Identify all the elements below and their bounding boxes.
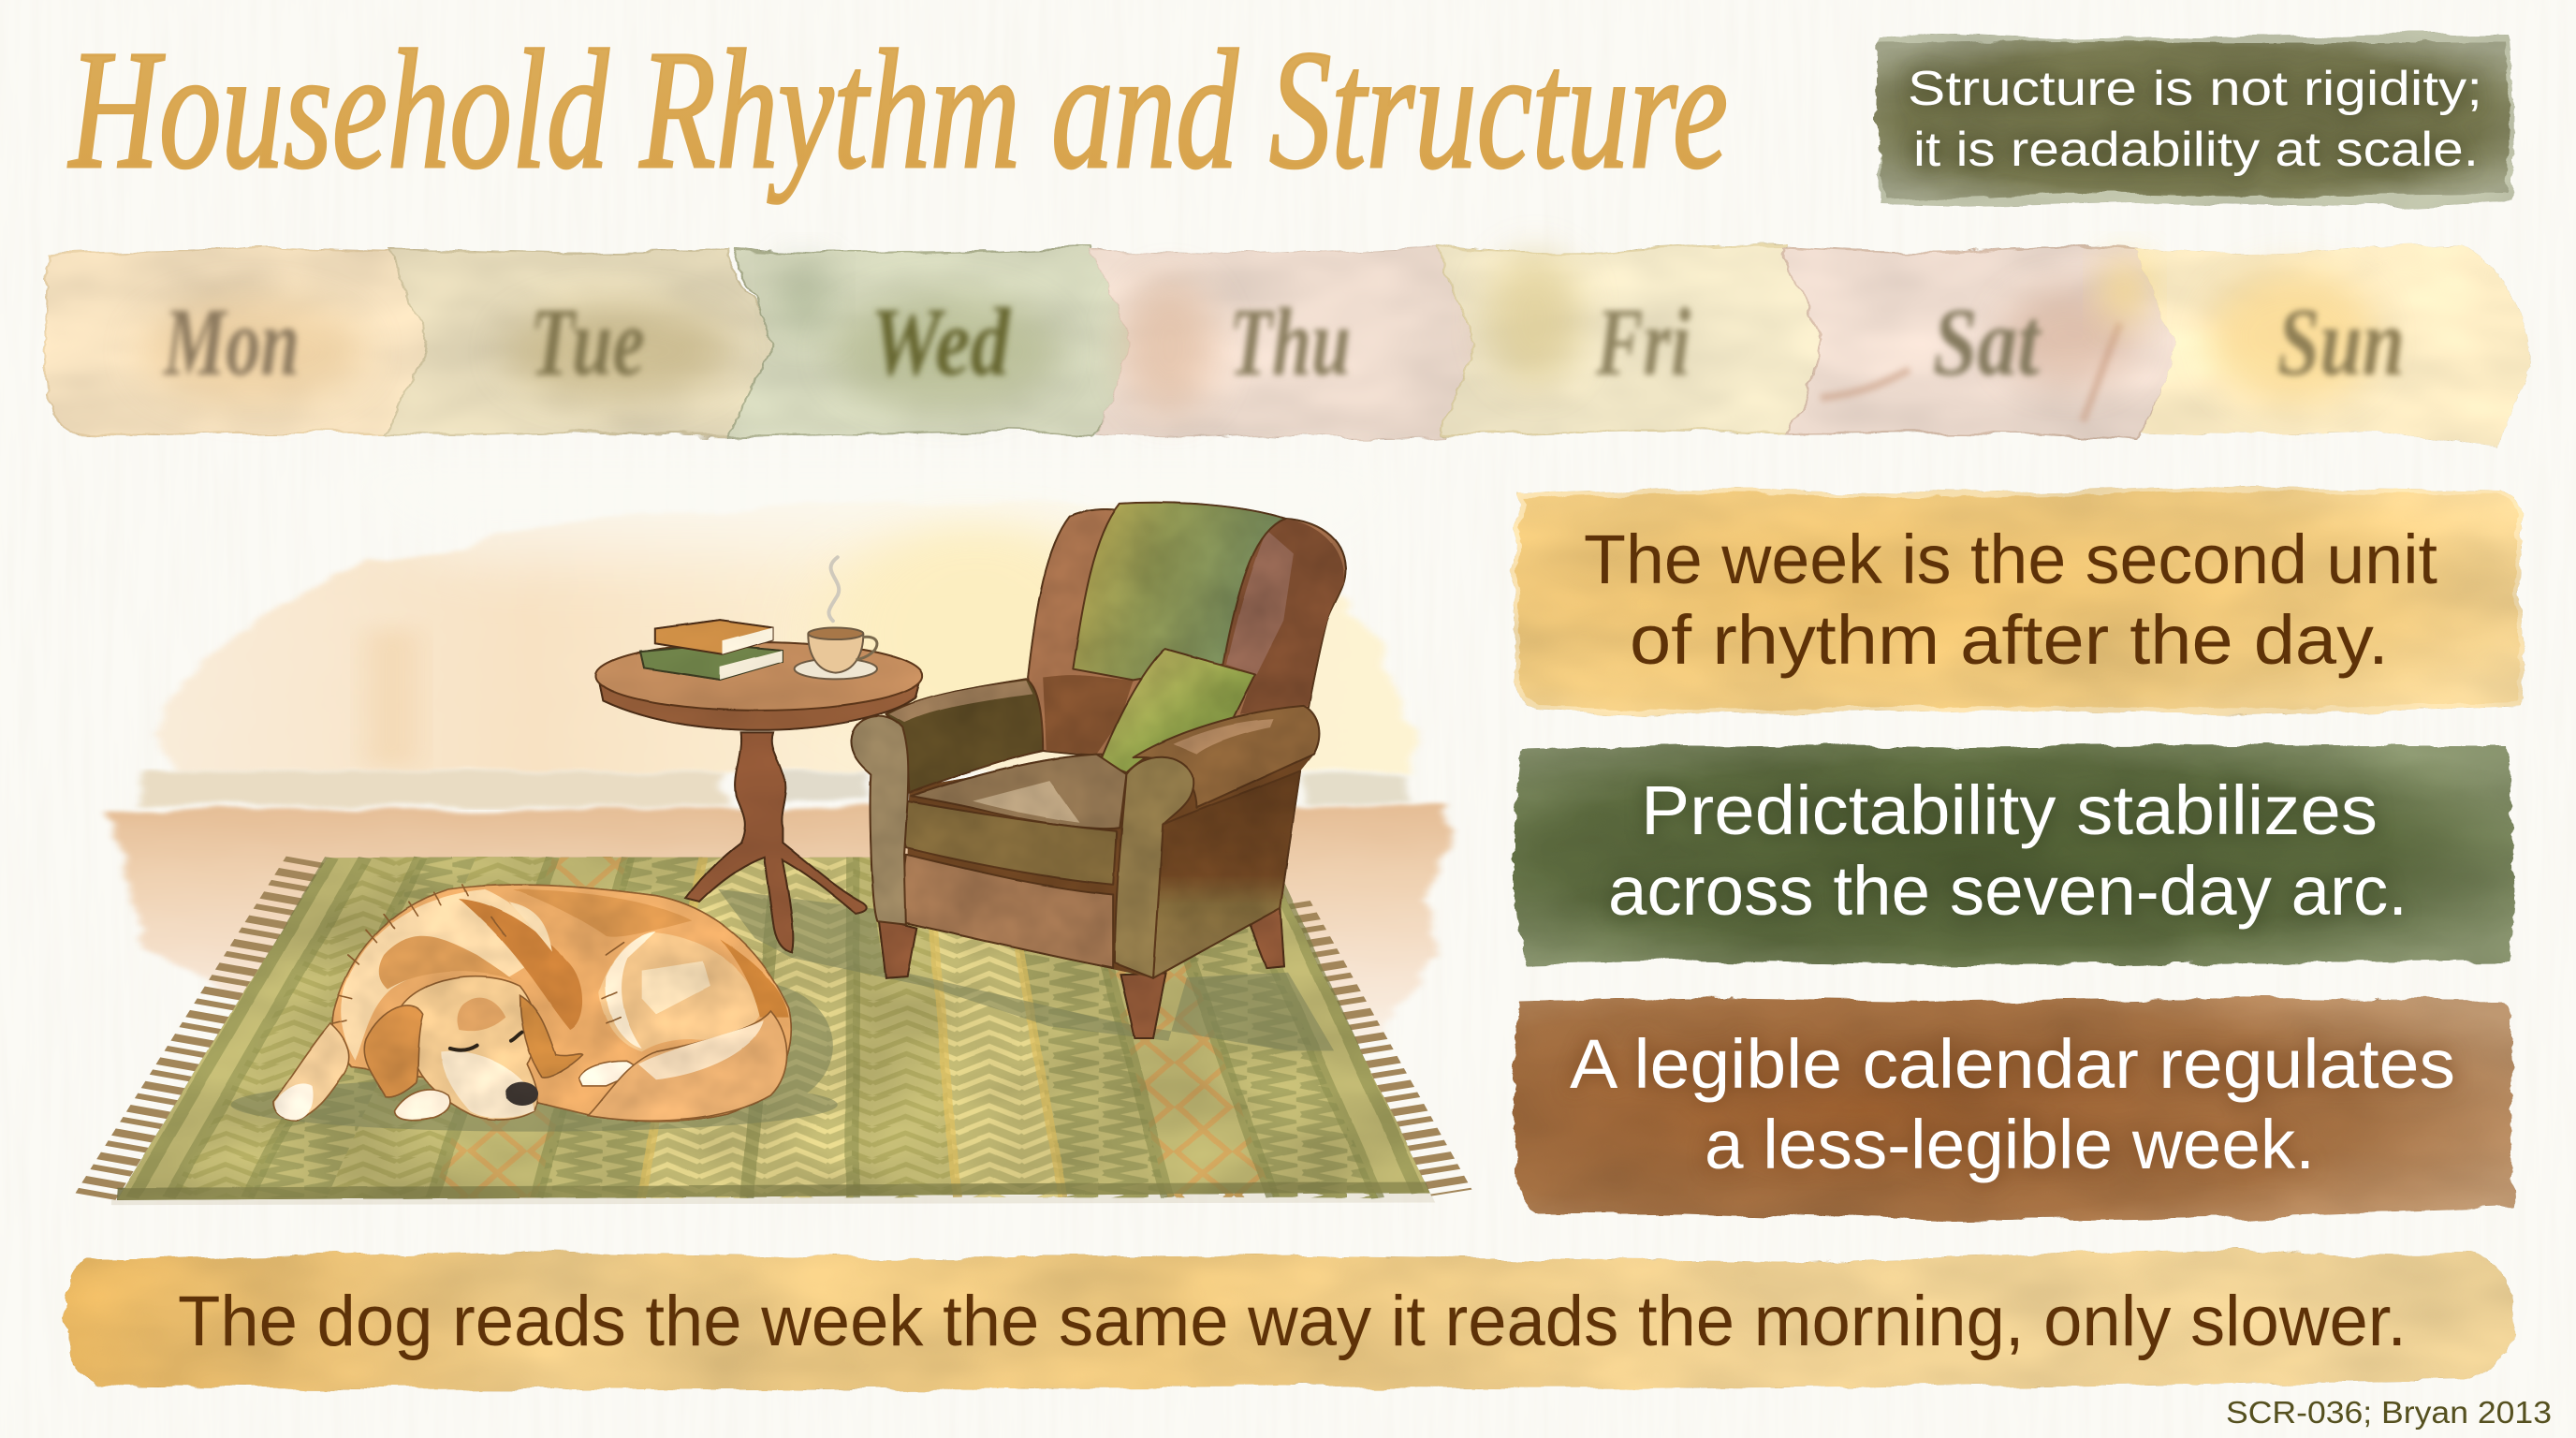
panel text	[1608, 771, 2408, 930]
hip highlight	[642, 961, 710, 1014]
panel wash	[1513, 998, 2514, 1221]
mane fur tufts	[334, 885, 624, 1023]
banner wash	[65, 1249, 2515, 1389]
steam	[828, 557, 839, 621]
shadows on rug	[231, 889, 1334, 1132]
panel text: across the seven-day arc.	[1608, 852, 2408, 930]
chair silhouette	[906, 721, 1313, 978]
panel text	[1584, 521, 2437, 679]
text panel: legible calendar	[1513, 998, 2514, 1221]
orange book	[655, 620, 773, 654]
panel text	[1570, 1025, 2455, 1183]
armchair	[851, 503, 1345, 1038]
throw blanket	[1073, 503, 1285, 680]
source note: SCR-036; Bryan 2013	[2226, 1395, 2552, 1430]
table base	[686, 732, 867, 953]
front leg and paw	[272, 1023, 349, 1121]
left ear	[364, 1005, 423, 1097]
dog body	[332, 885, 791, 1122]
rug fringe right	[1290, 903, 1452, 1193]
panel text: a less-legible week.	[1705, 1106, 2315, 1183]
chair right side	[1153, 770, 1300, 978]
left arm top	[886, 679, 1043, 793]
head	[397, 976, 537, 1120]
rug stripes	[132, 858, 1418, 1197]
wall wash	[159, 503, 1412, 771]
day: Mon: Mon	[163, 288, 300, 396]
wall glow	[819, 522, 1132, 747]
text panel: the week	[1515, 489, 2524, 713]
callout text: it is readability at scale.	[1913, 123, 2479, 177]
day: Tue	[384, 249, 780, 436]
day: Thu	[1090, 247, 1481, 438]
banner text: The dog reads the week the same way it reads the morning, only slower.	[178, 1282, 2407, 1361]
bottom banner	[65, 1249, 2515, 1389]
day: Fri: Fri	[1595, 288, 1690, 396]
right arm top	[1134, 706, 1319, 808]
rear shading	[721, 939, 789, 1018]
panel text: Predictability stabilizes	[1641, 771, 2378, 849]
table apron	[598, 674, 922, 730]
day ribbon: seven days	[44, 245, 2529, 448]
callout wash	[1876, 34, 2514, 208]
books	[641, 620, 783, 680]
day: Thu: Thu	[1229, 288, 1351, 396]
coffee cup and saucer	[795, 627, 877, 679]
golden retriever	[272, 885, 791, 1122]
chair back shaded side	[1223, 519, 1344, 714]
seat top	[911, 755, 1126, 829]
illustration: sleeping dog in living room	[95, 468, 1454, 1205]
day: Sun: Sun	[2277, 288, 2405, 396]
right arm front	[1115, 757, 1193, 978]
callout text	[1908, 62, 2482, 177]
tail	[588, 1011, 787, 1121]
scene backdrop, rug and table	[95, 468, 1454, 1205]
rug fringe left	[95, 859, 306, 1197]
rug pattern columns	[168, 858, 421, 1197]
panel wash	[1515, 489, 2524, 713]
text panel: predictability	[1515, 745, 2514, 964]
callout text: Structure is not rigidity;	[1908, 62, 2482, 116]
day: Sun	[2101, 245, 2529, 448]
chair back	[1028, 509, 1345, 755]
center paw	[395, 1090, 450, 1121]
rug shadow	[111, 1193, 1435, 1205]
panel text: of rhythm after the day.	[1630, 601, 2389, 679]
panel text: The week is the second unit	[1584, 521, 2437, 598]
muzzle	[441, 1051, 534, 1118]
left arm front	[851, 716, 908, 925]
back shading	[513, 889, 692, 937]
hind leg	[599, 932, 760, 1051]
green book	[641, 644, 783, 680]
panel text: A legible calendar regulates	[1570, 1025, 2455, 1103]
eyes	[450, 1033, 521, 1050]
table top	[595, 642, 923, 711]
hind paw	[579, 1061, 642, 1086]
rug bottom edge	[116, 1182, 1430, 1200]
right ear	[520, 995, 583, 1077]
mane	[341, 889, 545, 1061]
rug	[116, 858, 1430, 1200]
floor	[111, 806, 1454, 1041]
day: Sat: Sat	[1933, 288, 2042, 396]
panel wash	[1515, 745, 2514, 964]
wall shade	[369, 630, 415, 767]
day: Wed: Wed	[871, 288, 1012, 396]
day: Tue: Tue	[530, 288, 645, 396]
nose	[505, 1082, 538, 1106]
baseboard	[139, 771, 1412, 806]
day: Fri	[1437, 245, 1830, 434]
chair legs	[879, 906, 1284, 1038]
pillow	[1100, 649, 1255, 772]
day: Wed	[728, 247, 1137, 436]
title: Household Rhythm and Structure	[68, 16, 1728, 204]
body band	[459, 899, 582, 1030]
wall top fade	[332, 468, 1389, 595]
day: Mon	[44, 245, 435, 434]
day: Sat	[1781, 247, 2179, 440]
callout: structure is not rigidity	[1876, 34, 2514, 208]
chair base front	[903, 855, 1113, 968]
side table	[595, 642, 923, 953]
seat cushion	[902, 801, 1117, 885]
